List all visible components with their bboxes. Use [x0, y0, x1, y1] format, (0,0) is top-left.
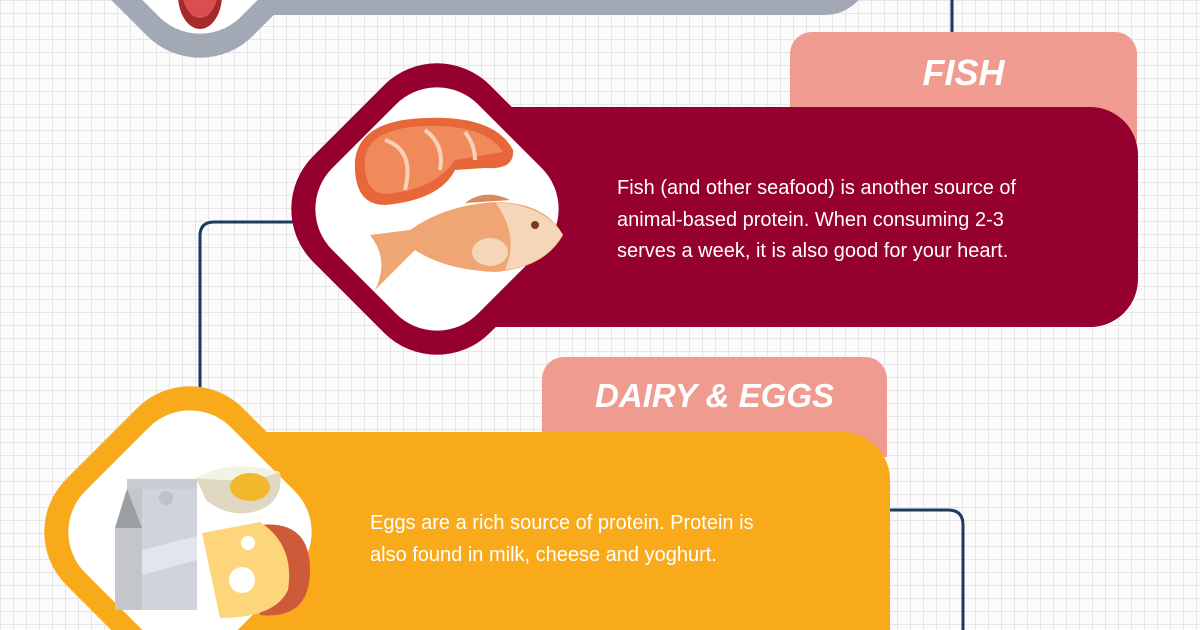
label: fish — [790, 32, 1137, 142]
panel: dairy & eggs — [250, 432, 890, 630]
label: fish: FISH — [922, 52, 1004, 93]
icon frame: fish — [260, 32, 614, 386]
icon: meat — [178, 0, 222, 29]
label: dairy & eggs: DAIRY & EGGS — [595, 377, 834, 414]
text: fish description: Fish (and other seafood) is another source of animal-based protein. When consuming 2-3 serves a week, it is also good for your heart. — [617, 177, 1016, 262]
icon frame: dairy — [13, 355, 367, 630]
label: dairy & eggs — [542, 357, 887, 457]
icon: milk, egg, cheese — [115, 466, 310, 618]
text: dairy description: Eggs are a rich source of protein. Protein is also found in milk, cheese and yoghurt. — [370, 512, 754, 566]
panel: meat (top, cut off) — [111, 0, 858, 58]
panel: fish — [420, 107, 1138, 327]
icon: salmon and fish — [354, 118, 563, 290]
